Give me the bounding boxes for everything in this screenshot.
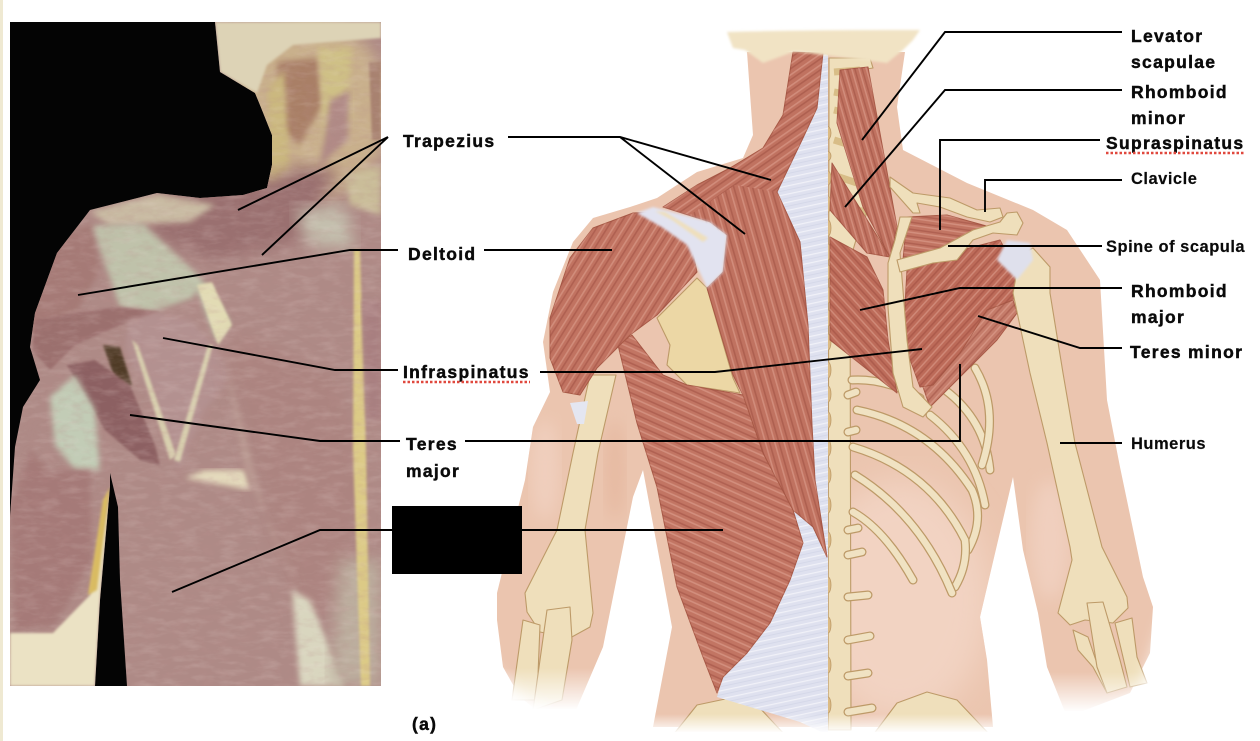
muscle: left trapezius: [663, 52, 827, 557]
tendon: left acromion: [637, 207, 727, 288]
scapula: spine and acromion: [897, 212, 1023, 272]
label: Spine of scapula: Spine of scapula: [1106, 238, 1245, 256]
pelvis right crest: [873, 692, 990, 735]
spellcheck underline: Supraspinatus: [1106, 152, 1245, 154]
label: Rhomboid minor: Rhomboid: [1131, 82, 1228, 102]
spellcheck underline: Infraspinatus: [403, 381, 530, 383]
lower spinous processes: [848, 392, 872, 712]
left scapula: [657, 278, 740, 393]
spine knobs: [823, 126, 831, 713]
muscle: rhomboid minor: [830, 163, 890, 257]
head base: [727, 30, 920, 63]
label: Rhomboid major: Rhomboid: [1131, 281, 1228, 301]
label: Rhomboid minor: minor: [1131, 108, 1186, 128]
spine column: [823, 58, 873, 730]
leader lines: [78, 32, 1122, 592]
redaction box: [392, 506, 522, 574]
label: Teres minor: Teres minor: [1130, 342, 1243, 362]
scapula: medial border: [888, 217, 932, 417]
label: Clavicle: Clavicle: [1131, 170, 1197, 188]
muscle: infraspinatus and teres minor: [903, 240, 1020, 387]
label: Trapezius: Trapezius: [403, 131, 495, 151]
ribs: [852, 368, 990, 593]
label: Infraspinatus: Infraspinatus: [403, 362, 530, 382]
label: Deltoid: Deltoid: [408, 244, 476, 264]
muscle: left latissimus dorsi: [618, 335, 803, 693]
muscle: rhomboid major: [830, 237, 897, 393]
label: Humerus: Humerus: [1131, 435, 1206, 453]
photo backdrop: [10, 22, 381, 686]
label: figure part (a): (a): [412, 714, 437, 734]
bottom fade: [480, 610, 1200, 741]
page edge strip: [0, 0, 3, 741]
right clavicle: [890, 177, 1003, 222]
muscle: supraspinatus: [903, 215, 990, 260]
label: Teres major: Teres: [406, 434, 458, 454]
muscle: left deltoid: [550, 212, 697, 395]
muscle: levator scapulae: [837, 67, 897, 257]
left deltoid tendon: [570, 401, 588, 424]
label: Levator scapulae: Levator: [1131, 26, 1203, 46]
label: Supraspinatus: Supraspinatus: [1106, 133, 1244, 153]
panel: cadaver photograph: [10, 20, 390, 686]
tendon: right shoulder: [997, 240, 1033, 280]
label: Teres major: major: [406, 461, 460, 481]
muscle: teres major: [923, 300, 1017, 407]
photo: back and shoulder tissue: [10, 20, 390, 686]
pelvis left crest: [673, 698, 785, 735]
left humerus and forearm: [512, 375, 616, 710]
right humerus and forearm: [1013, 248, 1147, 693]
label: Levator scapulae: scapulae: [1131, 52, 1216, 72]
panel: back anatomy illustration: [480, 30, 1200, 741]
label: Rhomboid major: major: [1131, 307, 1185, 327]
skin silhouette: [497, 52, 1153, 727]
aponeurosis: central fascia: [717, 53, 828, 735]
